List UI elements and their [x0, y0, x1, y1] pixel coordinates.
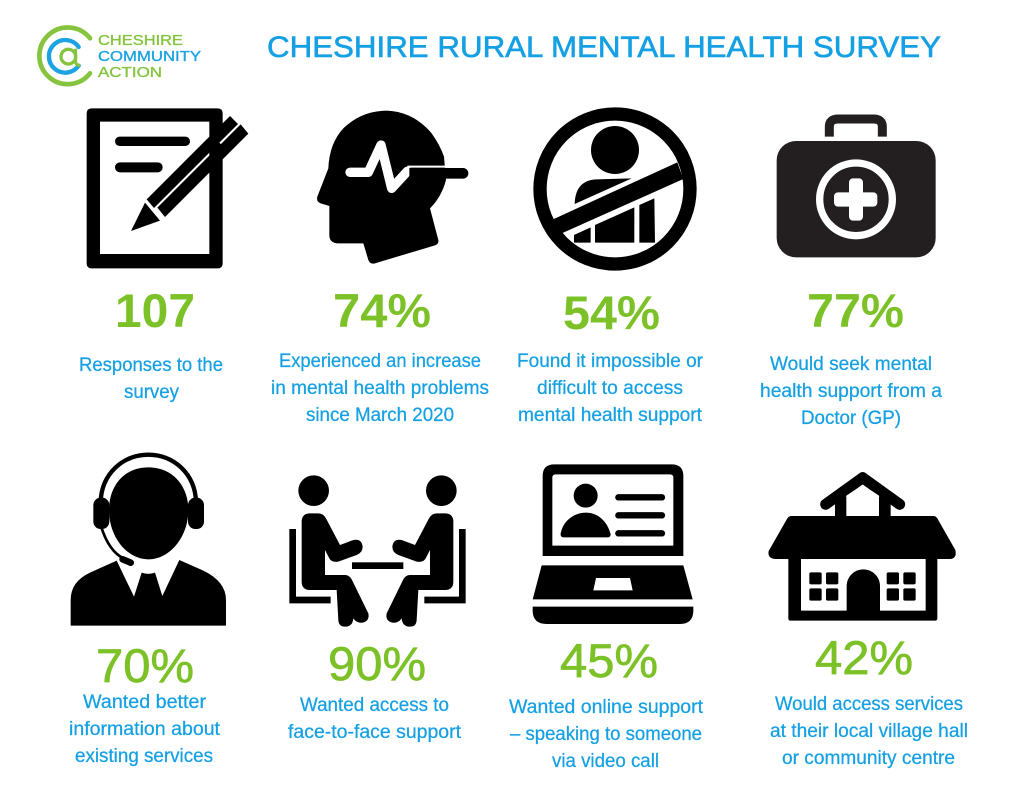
caption: online: Wanted online support	[509, 697, 704, 718]
title: CHESHIRE RURAL MENTAL HEALTH SURVEY	[267, 31, 941, 64]
caption: increase	[271, 351, 489, 426]
caption: face-to-face	[288, 695, 462, 743]
logo wordmark: COMMUNITY	[98, 49, 201, 65]
caption: doctor: Would seek mental	[770, 354, 932, 375]
caption: face-to-face: Wanted access to	[300, 695, 449, 716]
panel: access difficulty	[517, 114, 704, 426]
caption: access: difficult to access	[537, 378, 683, 399]
caption: responses: survey	[124, 382, 179, 403]
icon: head with pulse	[317, 111, 468, 264]
caption: increase: since March 2020	[306, 405, 454, 426]
logo wordmark: ACTION	[98, 65, 162, 81]
panel: village hall	[768, 478, 968, 769]
caption: village hall: at their local village hall	[770, 721, 968, 742]
stat: 70%: 70%	[96, 639, 194, 692]
caption: access: mental health support	[518, 405, 703, 426]
panel: face-to-face support	[288, 475, 466, 743]
panel: increase in problems	[271, 111, 489, 426]
panel: online support	[509, 464, 704, 772]
logo wordmark	[98, 33, 201, 81]
caption: online	[509, 697, 704, 772]
panel: better information	[69, 455, 226, 767]
icon: agent with headset	[71, 455, 226, 626]
icon: laptop with video call	[533, 464, 693, 624]
caption: doctor: health support from a	[760, 381, 942, 402]
caption: face-to-face: face-to-face support	[288, 722, 462, 743]
stat: 107: 107	[115, 284, 195, 337]
logo mark	[39, 27, 90, 84]
caption: access: Found it impossible or	[517, 351, 704, 372]
caption: doctor: Doctor (GP)	[801, 408, 901, 429]
panel: responses	[79, 108, 248, 403]
stat: 45%: 45%	[560, 634, 658, 687]
stat: 74%: 74%	[333, 284, 431, 337]
panel: doctor support	[760, 119, 942, 429]
icon: notepad and pencil	[87, 108, 248, 268]
caption: doctor	[760, 354, 942, 429]
caption: information: existing services	[75, 746, 213, 767]
icon: medical case	[777, 119, 936, 257]
caption: increase: in mental health problems	[271, 378, 489, 399]
logo: Cheshire Community Action	[39, 27, 201, 84]
stat: 54%: 54%	[563, 286, 660, 339]
caption: access	[517, 351, 704, 426]
caption: information	[69, 692, 221, 767]
caption: information: Wanted better	[83, 692, 207, 713]
caption: village hall: or community centre	[782, 748, 955, 769]
caption: online: – speaking to someone	[510, 724, 702, 745]
caption: online: via video call	[552, 751, 659, 772]
caption: village hall: Would access services	[775, 694, 963, 715]
stat: 90%: 90%	[328, 637, 426, 690]
stat: 77%: 77%	[807, 284, 904, 337]
caption: village hall	[770, 694, 968, 769]
stat: 42%: 42%	[815, 631, 913, 684]
icon: village hall	[768, 478, 956, 621]
icon: two people at table	[289, 475, 466, 627]
logo wordmark: CHESHIRE	[98, 33, 183, 49]
caption: responses: Responses to the	[79, 355, 223, 376]
caption: increase: Experienced an increase	[279, 351, 481, 372]
caption: responses	[79, 355, 223, 403]
caption: information: information about	[69, 719, 221, 740]
icon: prohibited person	[540, 114, 690, 264]
